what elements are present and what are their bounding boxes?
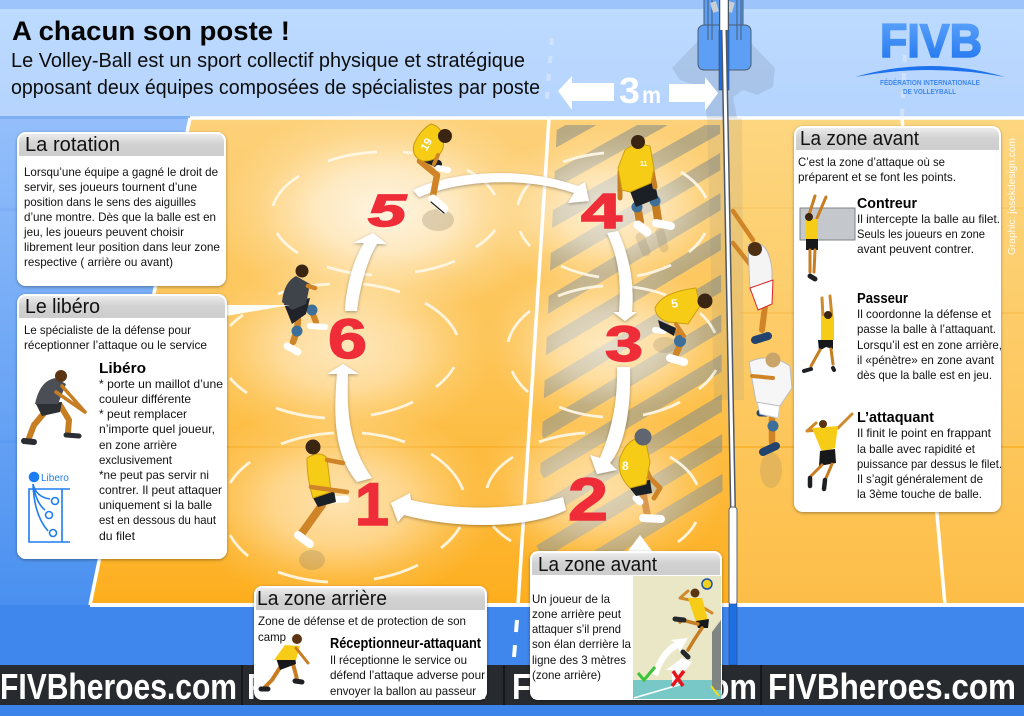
arrow 6 to 5 <box>345 233 387 311</box>
number 4: 4 <box>581 185 622 239</box>
title: A chacun son poste ! <box>12 16 290 46</box>
text: passeur <box>857 307 1002 382</box>
text: l'attaquant: Il s’agit généralement de <box>857 472 983 486</box>
text: libéro rules: en zone arrière <box>99 438 177 452</box>
icon: cross mark <box>672 671 684 686</box>
heading: la zone arrière: La zone arrière <box>257 588 387 610</box>
arrow 5 to 4 <box>413 173 589 203</box>
background: bottom blue floor <box>0 605 1024 667</box>
panel: la zone avant (right) <box>794 126 1002 512</box>
subheading: libéro: Libéro <box>99 361 146 377</box>
text: libéro rules: * peut remplacer <box>99 407 187 421</box>
text: l'attaquant: la 3ème touche de balle. <box>857 487 982 501</box>
text: libéro rules: uniquement si la balle <box>99 498 212 512</box>
rotation arrows <box>327 173 637 525</box>
text: rotation: d’une montre. Dès que la balle est en <box>24 210 216 224</box>
number 3: 3 <box>605 316 643 372</box>
3 metres marker <box>558 70 718 111</box>
credit: Graphic: josekdesign.com <box>1007 138 1018 255</box>
icon: ball <box>702 579 712 589</box>
text: réceptionneur-attaquant: défend l’attaque adverse pour <box>330 668 485 682</box>
icon: blocker at net <box>800 196 855 279</box>
icon: libero player <box>24 370 85 442</box>
player 1 <box>298 440 347 570</box>
text: rotation: respective ( arrière ou avant) <box>24 255 173 269</box>
player 3: 5 <box>670 296 679 311</box>
position numbers <box>328 185 643 538</box>
court: right half <box>726 118 1024 605</box>
text: zone avant intro: préparent et se font les points. <box>798 170 956 184</box>
text: back row attack: Un joueur de la <box>532 592 610 606</box>
opposing blocker top <box>733 211 773 340</box>
icon: libero diagram: Libero <box>41 473 69 484</box>
footer banner: FIVBheroes.com <box>247 666 487 707</box>
text: back row attack: son élan derrière la <box>532 637 631 651</box>
court lines <box>90 118 1024 657</box>
FIVB logo: FÉDÉRATION INTERNATIONALE <box>880 78 980 87</box>
icon: libero diagram <box>29 472 70 542</box>
text: rotation <box>23 165 220 269</box>
text: libéro intro: Le spécialiste de la défense pour <box>24 323 191 337</box>
FIVB logo: DE VOLLEYBALL <box>903 87 956 96</box>
subheading: réceptionneur-attaquant: Réceptionneur-attaquant <box>330 636 481 652</box>
dashed position circles <box>230 152 716 582</box>
background: sky band <box>0 0 1024 117</box>
position glows <box>180 107 735 605</box>
icon: attacker <box>807 414 852 489</box>
text: l'attaquant: puissance par dessus le filet. <box>857 457 1002 471</box>
player 6 libero <box>282 264 325 352</box>
subtitle: opposant deux équipes composées de spécialistes par poste <box>11 77 540 99</box>
number 5: 5 <box>368 185 407 236</box>
arrow 1 to 6 <box>327 364 372 482</box>
text: libéro rules: du filet <box>99 529 136 543</box>
text: libéro rules: n’importe quel joueur, <box>99 422 215 436</box>
text: contreur: Il intercepte la balle au filet. <box>857 212 1000 226</box>
number 2: 2 <box>568 466 608 533</box>
text: l'attaquant: Il finit le point en frappant <box>857 426 992 440</box>
text: libéro intro: réceptionner l’attaque ou le service <box>24 338 207 352</box>
text: back row attack: zone arrière peut <box>532 607 622 621</box>
front zone hatching <box>536 125 722 551</box>
text: libéro rules: *ne peut pas servir ni <box>99 468 209 482</box>
text: l'attaquant <box>857 426 1002 501</box>
text: rotation: servir, ses joueurs tournent d’une <box>24 180 197 194</box>
text: passeur: passe la balle à l’attaquant. <box>857 322 996 336</box>
text: contreur: avant peuvent contrer. <box>857 242 974 256</box>
subheading: passeur: Passeur <box>857 291 908 307</box>
opposing blocker bottom <box>749 352 792 488</box>
text: passeur: dès que la balle est en jeu. <box>857 368 992 382</box>
text: passeur: Lorsqu’il est en zone arrière, <box>857 338 1002 352</box>
text: back row attack: attaquer s’il prend <box>532 622 621 636</box>
net shadow <box>672 42 775 400</box>
heading: la zone avant: La zone avant <box>538 554 657 576</box>
icon: setter <box>804 296 834 371</box>
heading: la rotation: La rotation <box>25 134 120 156</box>
text: libéro rules: * porte un maillot d’une <box>99 377 223 391</box>
player 2 <box>619 428 661 519</box>
zone avant pointer <box>628 535 652 551</box>
subtitle: Le Volley-Ball est un sport collectif physique et stratégique <box>11 50 525 72</box>
text: zone arrière intro: Zone de défense et de protection de son <box>258 614 466 628</box>
icon: back row attacker <box>675 588 712 657</box>
arrow 3 to 2 <box>590 367 630 474</box>
net post <box>698 0 751 665</box>
arrow: forbidden <box>666 658 692 684</box>
text: back row attack <box>532 592 631 682</box>
arrow 2 to 1 <box>391 493 566 525</box>
background: left blue floor <box>0 116 200 611</box>
player 4: 11 <box>640 161 648 168</box>
panel: le libéro <box>17 294 227 559</box>
text: passeur: il «pénètre» en zone avant <box>857 353 995 367</box>
3 metres marker: m <box>642 82 661 108</box>
arrow 4 to 3 <box>607 231 637 321</box>
text: réceptionneur-attaquant <box>330 653 485 698</box>
panel: la zone avant (bottom) <box>530 551 722 700</box>
FIVB logo <box>855 14 1005 96</box>
FIVB logo: FIVB <box>880 14 982 67</box>
subheading: contreur: Contreur <box>857 196 917 212</box>
text: zone avant intro: C’est la zone d’attaque où se <box>798 155 945 169</box>
subheading: l'attaquant: L’attaquant <box>857 410 934 426</box>
panel: la rotation <box>17 132 226 286</box>
court: left half <box>90 118 734 605</box>
text: zone arrière intro <box>258 614 466 644</box>
icon: receiver <box>261 634 308 689</box>
subtitle <box>11 50 540 99</box>
text: libéro rules: est en dessous du haut <box>99 513 217 527</box>
panel: la zone arrière <box>254 586 487 700</box>
footer banner <box>0 665 1024 716</box>
text: contreur: Seuls les joueurs en zone <box>857 227 985 241</box>
illustration: back row attack <box>633 576 721 699</box>
text: libéro intro <box>24 323 207 352</box>
text: passeur: Il coordonne la défense et <box>857 307 992 321</box>
3 metres marker: 3 <box>619 70 640 111</box>
footer banner: FIVBheroes.com <box>512 666 757 707</box>
text: rotation: jeu, les joueurs peuvent choisir <box>23 225 184 239</box>
heading: la zone avant: La zone avant <box>800 128 919 150</box>
player 3 <box>653 288 712 362</box>
text: back row attack: (zone arrière) <box>532 668 601 682</box>
player 4 <box>618 135 671 252</box>
text: libéro rules: exclusivement <box>99 453 173 467</box>
arrow: run up <box>652 638 688 676</box>
text: libéro rules: couleur différente <box>99 392 191 406</box>
number 1: 1 <box>355 471 389 538</box>
text: rotation: librement leur position dans leur zone <box>24 240 220 254</box>
text: libéro rules: contrer. Il peut attaquer <box>99 483 222 497</box>
text: réceptionneur-attaquant: Il réceptionne le service ou <box>330 653 467 667</box>
text: zone arrière intro: camp <box>258 630 286 644</box>
footer banner: FIVBheroes.com <box>0 666 237 707</box>
player 2: 8 <box>622 459 629 473</box>
text: zone avant intro <box>798 155 956 184</box>
text: rotation: Lorsqu’une équipe a gagné le droit de <box>24 165 218 179</box>
text: back row attack: ligne des 3 mètres <box>532 653 626 667</box>
player 5 <box>413 124 454 231</box>
heading: le libéro: Le libéro <box>25 296 100 318</box>
text: rotation: position dans le sens des aiguilles <box>24 195 196 209</box>
player 5: 19 <box>419 136 435 153</box>
text: contreur <box>857 212 1000 256</box>
text: libéro rules <box>99 377 223 543</box>
text: réceptionneur-attaquant: envoyer la ballon au passeur <box>330 684 476 698</box>
number 6: 6 <box>328 307 367 370</box>
icon: check mark <box>638 667 655 680</box>
libero pointer <box>226 305 290 316</box>
text: l'attaquant: la balle avec rapidité et <box>857 442 976 456</box>
